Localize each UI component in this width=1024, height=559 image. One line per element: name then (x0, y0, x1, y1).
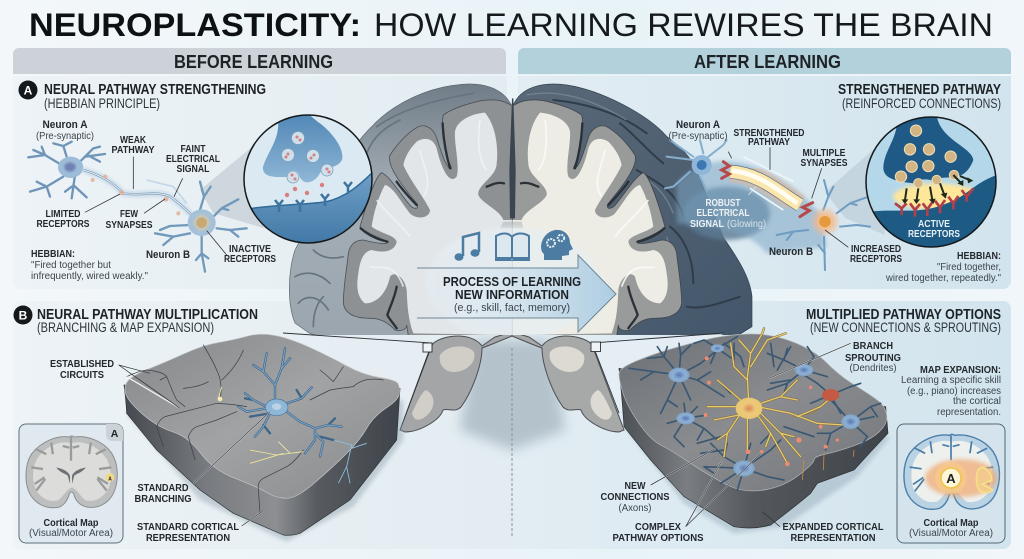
pale wash behind process arrow (470, 224, 596, 335)
central brain cross-section (289, 84, 770, 538)
right outer hemisphere (513, 84, 752, 347)
hebbian note: HEBBIAN: (957, 251, 1001, 262)
side axon (333, 440, 367, 483)
labels: BRANCHING (134, 494, 192, 505)
panel: multiplied pathway options (591, 306, 1005, 544)
labels: STANDARD CORTICAL (137, 522, 239, 533)
labels: INCREASED (851, 244, 901, 255)
inset: cortical map before: A (111, 428, 119, 440)
labels: MULTIPLE (802, 148, 846, 159)
title: HOW LEARNING REWIRES THE BRAIN (374, 7, 993, 43)
yellow glow (893, 183, 980, 210)
labels: ELECTRICAL (166, 154, 220, 165)
right outer folds (553, 100, 740, 308)
labels: NEW (624, 481, 646, 492)
shadowed brainstem gap (460, 340, 565, 450)
cortical tissue block (119, 334, 403, 542)
labels: STANDARD (138, 483, 188, 494)
hebbian note: "Fired together, (937, 262, 1001, 273)
magnification cone (825, 148, 885, 235)
neuron B (155, 182, 247, 272)
panel: before learning, neural pathway strengthening (18, 80, 375, 282)
weak pathway (83, 170, 192, 215)
inset: cortical map after: (Visual/Motor Area) (909, 528, 993, 539)
map expansion note: Learning a specific skill (901, 375, 1001, 386)
section heading: (HEBBIAN PRINCIPLE) (44, 96, 160, 111)
labels: EXPANDED CORTICAL (782, 522, 884, 533)
labels: BRANCH (853, 341, 893, 352)
block sides (124, 385, 400, 535)
header: after learning (518, 48, 1011, 74)
map expansion note: (e.g., piano) increases (907, 386, 1001, 397)
synapse clusters (722, 162, 813, 217)
glowing strengthened pathway (730, 172, 800, 205)
labels: Neuron B (769, 246, 813, 258)
labels: INACTIVE (229, 244, 271, 255)
hebbian note (885, 251, 1001, 284)
labels: FEW (120, 209, 138, 220)
right cut surface (512, 100, 682, 347)
labels: CONNECTIONS (600, 492, 670, 503)
labels: (Axons) (618, 503, 652, 514)
labels (50, 359, 239, 544)
magnified synapse: weak (240, 112, 375, 250)
labels: SIGNAL (690, 219, 724, 230)
magnified synapse: active (866, 115, 997, 253)
leader lines (728, 147, 848, 247)
title (29, 7, 993, 43)
weak neurons and pathway (28, 142, 247, 272)
hebbian note: HEBBIAN: (31, 249, 75, 260)
block top surface (125, 334, 399, 498)
standard neuron (238, 348, 342, 457)
section heading: (BRANCHING & MAP EXPANSION) (37, 320, 214, 335)
arrow text: PROCESS OF LEARNING (443, 275, 581, 289)
labels: PATHWAY OPTIONS (612, 533, 704, 544)
right temporal lobe (512, 332, 624, 432)
section heading (806, 306, 1001, 335)
zoom bracket (283, 333, 432, 430)
badge A (18, 80, 38, 100)
arrow text: (e.g., skill, fact, memory) (454, 302, 570, 314)
block sides (619, 368, 888, 528)
badge B (14, 306, 32, 324)
neuron bodies (668, 344, 860, 476)
badge A: A (24, 84, 33, 98)
inset: cortical map after (897, 424, 1005, 543)
labels: RECEPTORS (36, 219, 90, 230)
arrow shape (417, 255, 616, 332)
map expansion note (901, 365, 1001, 418)
central fissure (509, 98, 516, 218)
labels: (Dendrites) (850, 363, 896, 374)
active receptors (895, 188, 973, 217)
labels: CIRCUITS (60, 370, 104, 381)
vesicles (282, 132, 333, 183)
labels: (Glowing) (727, 219, 766, 230)
labels: ACTIVE (918, 219, 950, 230)
red active neuron (822, 389, 839, 401)
receptors (275, 182, 352, 212)
inset: cortical map after: Cortical Map (924, 518, 978, 529)
labels: ESTABLISHED (50, 359, 114, 370)
labels: SPROUTING (845, 353, 901, 364)
left outer hemisphere (289, 84, 512, 347)
faint signal dots (91, 175, 180, 215)
mini brain (26, 436, 117, 508)
left temporal lobe (400, 332, 512, 432)
expanded tissue block (619, 328, 891, 533)
magnification cone (200, 147, 280, 233)
labels: (Pre-synaptic) (668, 131, 728, 142)
labels: RECEPTORS (224, 254, 276, 265)
section heading: NEURAL PATHWAY MULTIPLICATION (37, 306, 258, 323)
map expansion note: MAP EXPANSION: (920, 365, 1001, 376)
header: before learning: BEFORE LEARNING (174, 52, 333, 72)
release arrows (905, 175, 969, 200)
inset: cortical map before: (Visual/Motor Area) (29, 528, 113, 539)
labels: RECEPTORS (850, 254, 902, 265)
labels: SYNAPSES (800, 158, 848, 169)
left outer folds (295, 93, 473, 327)
section heading: NEURAL PATHWAY STRENGTHENING (44, 81, 266, 98)
cracks (127, 345, 383, 513)
labels: ELECTRICAL (696, 208, 750, 219)
icon: head with gears (541, 230, 573, 260)
labels: REPRESENTATION (146, 533, 230, 544)
icon: open book (495, 233, 530, 261)
labels: SIGNAL (176, 164, 210, 175)
orange side streaks (802, 450, 854, 480)
block shadow (127, 400, 403, 542)
labels: COMPLEX (635, 522, 681, 533)
labels: PATHWAY (112, 145, 155, 156)
block shadow (624, 427, 891, 533)
labels: WEAK (120, 135, 147, 146)
process of learning arrow (417, 230, 616, 332)
hebbian note (31, 249, 148, 282)
mini brain expanded (904, 434, 999, 509)
neuron A strong (665, 140, 727, 190)
yellow A marker: A (946, 471, 956, 486)
labels: LIMITED (46, 209, 80, 220)
labels: ROBUST (706, 198, 740, 209)
labels (36, 119, 276, 265)
labels: SYNAPSES (106, 220, 153, 231)
panel: neural pathway multiplication (14, 306, 432, 544)
labels: (Pre-synaptic) (36, 131, 94, 142)
map expansion note: representation. (937, 407, 1001, 418)
labels: Neuron A (42, 119, 88, 131)
section heading (838, 81, 1001, 111)
sparks (218, 387, 303, 463)
postsynaptic pool (874, 176, 996, 246)
new axon connections (791, 395, 837, 425)
synapse sparks (704, 356, 839, 466)
hebbian note: wired together, repeatedly." (885, 273, 1001, 284)
vesicles (895, 125, 959, 188)
blue glow (677, 161, 827, 253)
map expansion note: the cortical (953, 396, 1001, 407)
labels: Neuron B (146, 249, 190, 261)
neuron A (28, 142, 105, 198)
labels: PATHWAY (748, 137, 790, 148)
inset: cortical map before: A (108, 476, 112, 482)
leader lines (651, 343, 851, 527)
inset: cortical map before (19, 424, 123, 543)
central yellow neuron (707, 328, 844, 463)
labels (600, 341, 901, 544)
left cut surface (343, 100, 513, 347)
hebbian note: infrequently, wired weakly." (31, 271, 148, 282)
leader lines (119, 365, 270, 526)
leader lines (85, 157, 227, 255)
blue neurons (629, 337, 881, 490)
header: before learning (13, 48, 506, 74)
inset: cortical map before: Cortical Map (44, 518, 98, 529)
neuron B strong (777, 180, 870, 270)
labels (668, 119, 960, 265)
panel: after learning, strengthened pathway (665, 81, 1001, 284)
active terminal (883, 115, 973, 183)
section heading (44, 81, 266, 111)
robust signal glow (683, 187, 770, 240)
section heading (37, 306, 258, 335)
header: after learning: AFTER LEARNING (694, 52, 841, 72)
labels: FAINT (180, 144, 206, 155)
labels: RECEPTORS (908, 229, 960, 240)
presynaptic terminal (263, 112, 342, 182)
title: NEUROPLASTICITY: (29, 7, 361, 43)
labels: Neuron A (676, 119, 720, 131)
badge B: B (19, 308, 28, 322)
block top surface (619, 334, 887, 491)
icon: music note (454, 233, 480, 261)
arrow text: NEW INFORMATION (455, 288, 569, 302)
arrow text (443, 275, 581, 314)
postsynaptic membrane (252, 172, 372, 242)
center dashed divider (511, 348, 513, 538)
hebbian note: "Fired together but (31, 260, 111, 271)
labels: REPRESENTATION (790, 533, 876, 544)
zoom bracket (591, 333, 724, 413)
labels: STRENGTHENED (734, 128, 804, 139)
